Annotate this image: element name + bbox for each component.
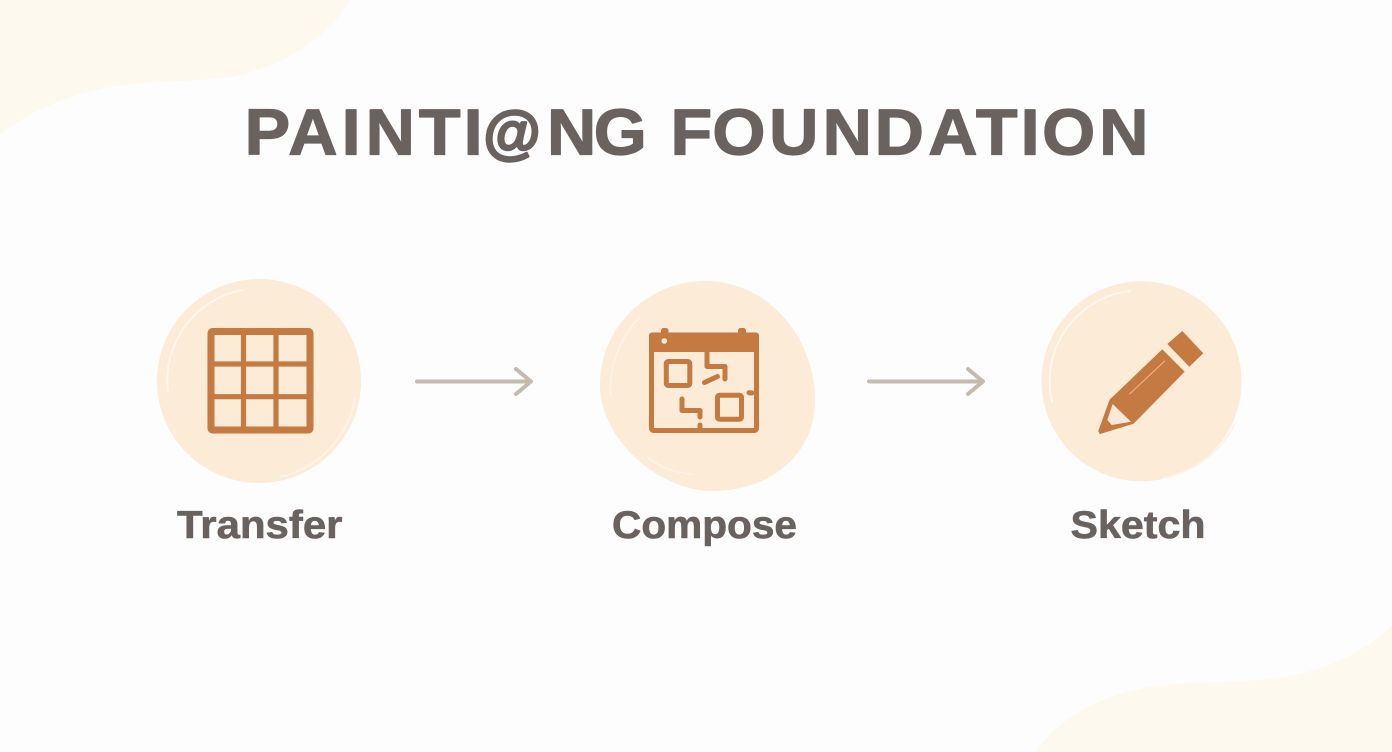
title: PAINTI [245, 97, 483, 169]
icon: grid [210, 331, 311, 431]
label: Sketch: Sketch [1070, 504, 1206, 547]
arrow: Transfer to Compose [417, 369, 531, 394]
title [245, 97, 1148, 169]
arrow: Compose to Sketch [869, 369, 983, 394]
highlight: Sketch circle [1050, 291, 1234, 478]
circle: Sketch [1042, 281, 1242, 481]
label: Compose: Compose [612, 504, 797, 547]
label: Transfer: Transfer [177, 504, 343, 547]
circle: Compose [600, 281, 815, 491]
highlight: Transfer circle [167, 290, 355, 477]
step 2: Compose [600, 281, 815, 547]
highlight: Compose blob [610, 317, 692, 474]
icon: floor plan calendar [649, 328, 759, 430]
icon: pencil [1099, 331, 1203, 434]
title: @ [484, 100, 540, 165]
title: NG FOUNDATION [547, 97, 1148, 169]
step 3: Sketch [1042, 281, 1242, 547]
circle: Transfer [157, 279, 361, 483]
background blob: bottom right [1036, 626, 1392, 752]
background blob: top left [0, 0, 350, 134]
step 1: Transfer [157, 279, 361, 547]
